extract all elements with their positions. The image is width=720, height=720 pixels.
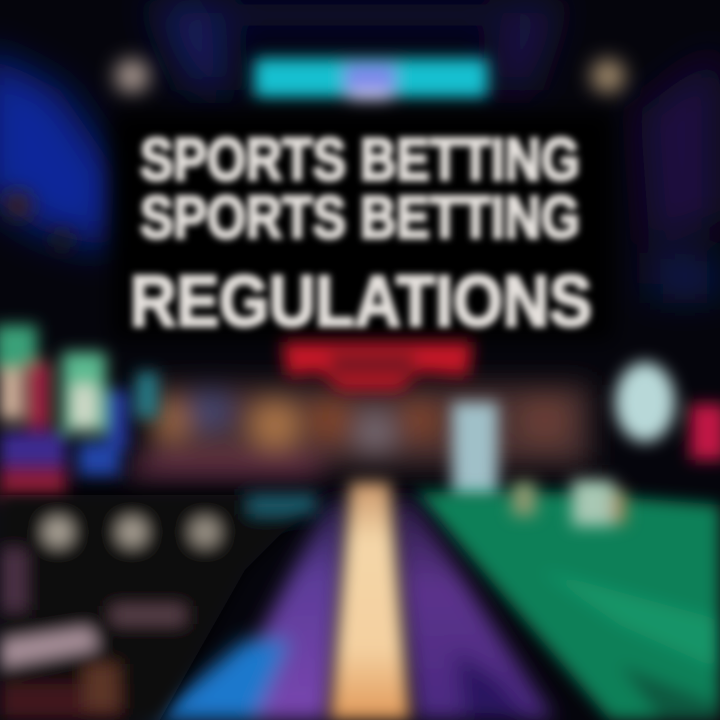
- title text: REGULATIONS: [130, 262, 592, 342]
- title backing: [112, 112, 612, 340]
- title text: SPORTS BETTING: [140, 184, 580, 251]
- arena ceiling: [0, 0, 720, 291]
- red banner: [282, 342, 473, 390]
- title text: SPORTS BETTING: [140, 126, 580, 193]
- ceiling lights: [5, 59, 625, 249]
- central light strip: [330, 482, 410, 720]
- right figures: [452, 362, 720, 506]
- cyan scoreboard: [254, 58, 488, 102]
- crowd band: [130, 385, 590, 476]
- pale players on field: [512, 480, 626, 526]
- lower left seating: [0, 494, 320, 720]
- left flags: [0, 325, 158, 500]
- green field: [415, 492, 720, 720]
- title panel: [112, 112, 612, 342]
- runway purple and blue: [150, 500, 555, 720]
- title text: [130, 126, 592, 342]
